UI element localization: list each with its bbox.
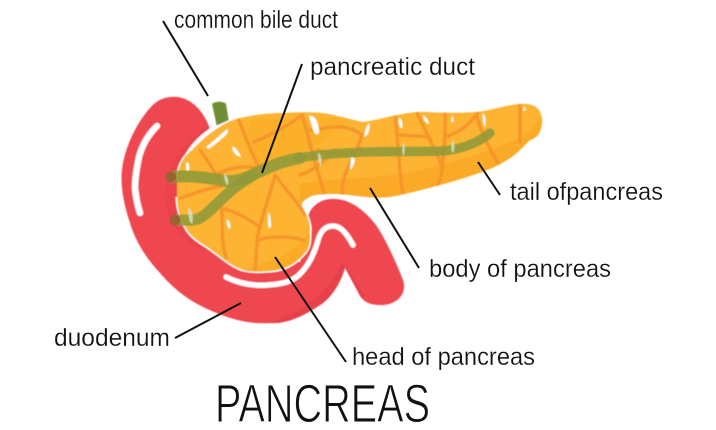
common bile duct stub	[212, 102, 230, 136]
lobule lines	[180, 104, 520, 270]
duodenum shading	[208, 127, 364, 324]
leader: tail of pancreas	[478, 162, 500, 195]
pancreas	[176, 103, 543, 272]
illustration	[121, 97, 560, 330]
leader lines	[163, 21, 500, 362]
label: common bile duct: common bile duct	[174, 6, 338, 34]
white gloss marks	[186, 106, 526, 229]
shaded lower edge	[300, 116, 543, 205]
duodenum	[121, 97, 404, 330]
highlight: left	[135, 126, 157, 213]
white gap around pancreas	[177, 120, 310, 272]
label: body of pancreas: body of pancreas	[429, 255, 611, 283]
pancreatic duct	[166, 133, 490, 226]
label: tail of pancreas: tail ofpancreas	[510, 178, 663, 206]
label: pancreatic duct: pancreatic duct	[310, 53, 475, 81]
leader: duodenum	[175, 303, 241, 338]
duct ends over duodenum	[166, 172, 176, 182]
highlight: lower curve	[226, 226, 353, 285]
leader: body of pancreas	[370, 188, 419, 268]
duct gloss	[188, 141, 454, 224]
label: head of pancreas: head of pancreas	[352, 343, 535, 371]
leader: pancreatic duct	[262, 64, 302, 173]
label: duodenum: duodenum	[54, 324, 170, 352]
leader: head of pancreas	[275, 257, 346, 362]
leader: common bile duct	[163, 21, 208, 96]
